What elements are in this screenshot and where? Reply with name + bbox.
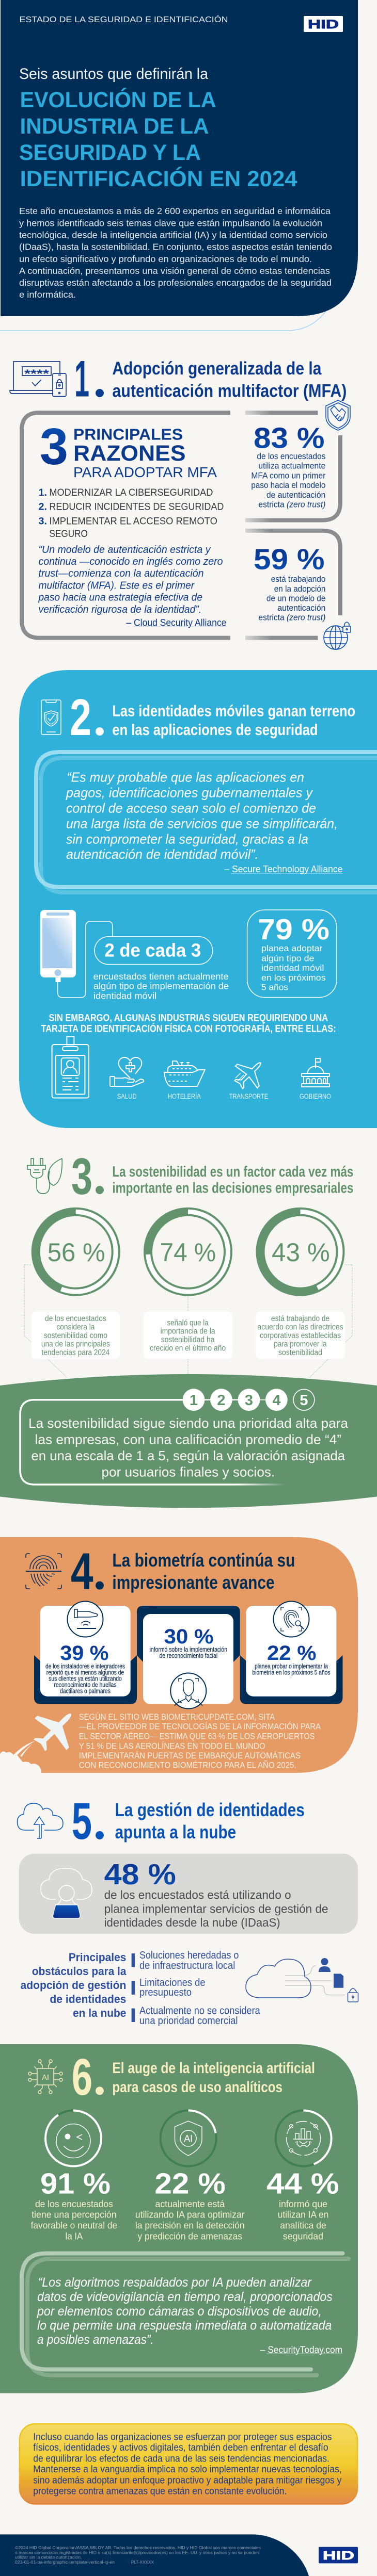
stat: 2 de cada 3: encuestados tienen actualmente <box>93 971 229 982</box>
intro paragraph: e informática. <box>19 289 76 300</box>
card: 43 percent text: está trabajando de <box>271 1314 329 1323</box>
logo: HID footer <box>319 2547 358 2563</box>
heading: identidades moviles: en las aplicaciones de seguridad <box>112 721 318 739</box>
card: 43 percent text: para promover la <box>274 1340 327 1348</box>
card: 22 percent: biometría en los próximos 5 años <box>252 1669 331 1676</box>
intro paragraph: (IDaaS), hasta la sostenibilidad. En conjunto, estos aspectos están teniendo <box>19 242 332 252</box>
stat: 79 percent <box>247 910 337 998</box>
panel: blue background <box>19 670 377 1128</box>
quote: security today <box>37 2275 343 2355</box>
panel: gray stat <box>19 1854 358 1934</box>
stat: 83 percent: estricta (zero trust) <box>258 500 325 510</box>
stat: 59 percent <box>254 543 325 623</box>
stat: 83 percent <box>251 422 326 510</box>
callout: conclusion: sino además adoptar un enfoque proactivo y adaptable para mitigar riesgos y <box>33 2474 342 2486</box>
icon: plug with leaf <box>27 1159 62 1194</box>
quote: cloud security alliance: trust—comienza con la autenticación <box>38 568 203 579</box>
chart: ring 43 percent <box>260 1212 340 1292</box>
card: 56 percent text: sostenibilidad como <box>44 1331 107 1340</box>
panel: quote frame back <box>41 758 377 892</box>
stat: 48 percent: 48 % <box>104 1858 176 1891</box>
heading: 3 principales razones: PRINCIPALES <box>73 426 183 444</box>
panel: stat 83 frame <box>245 413 340 520</box>
quote: security today: – SecurityToday.com <box>260 2344 342 2355</box>
quote: security today: lo que permite una respuesta inmediata o automatizada <box>37 2318 332 2333</box>
panel: quote frame back <box>27 2259 349 2375</box>
card: 74 percent text: importancia de la <box>161 1327 215 1336</box>
connectors: dotted lines <box>24 1265 352 1378</box>
decorative outline behind header <box>0 304 331 331</box>
main title: INDUSTRIA DE LA <box>20 114 209 139</box>
quote: security today: a posibles amenazas”. <box>37 2333 154 2347</box>
stat: 59 percent: estricta (zero trust) <box>258 613 325 623</box>
stat: 91 percent: tiene una percepción <box>32 2209 117 2220</box>
heading: obstacles: Principales <box>69 1951 126 1964</box>
heading: 3 principales razones <box>40 418 217 480</box>
panel: header <box>0 0 358 331</box>
panel: quote frame front <box>36 752 377 887</box>
stat: 91 percent: la IA <box>66 2231 83 2242</box>
quote: cloud security alliance: – Cloud Security Alliance <box>126 617 226 628</box>
heading number 6: 6 <box>72 2048 92 2106</box>
stat: 59 percent: en la adopción <box>274 584 325 594</box>
heading number 1: 1 <box>74 350 89 407</box>
panel: orange background <box>0 1537 358 1773</box>
card: 56 percent text <box>31 1311 120 1359</box>
quote: secure technology alliance: control de acceso sean solo el comienzo de <box>66 800 316 816</box>
text: sustainability rating <box>28 1415 349 1479</box>
list: reasons: REDUCIR INCIDENTES DE SEGURIDAD <box>49 501 224 513</box>
quote: security today: “Los algoritmos respaldados por IA pueden analizar <box>38 2275 312 2290</box>
section 4: biometrics <box>0 1537 358 1773</box>
list: reasons: MODERNIZAR LA CIBERSEGURIDAD <box>49 487 213 498</box>
section 1: MFA <box>10 350 351 649</box>
stat: 44 percent: 44 % <box>266 2167 339 2200</box>
section 6: artificial intelligence <box>0 2044 358 2393</box>
quote: secure technology alliance: “Es muy probable que las aplicaciones en <box>67 769 304 785</box>
stat: 83 percent: utiliza actualmente <box>258 461 325 470</box>
heading number 2: 2 <box>70 689 91 746</box>
stat: 91 percent: favorable o neutral de <box>31 2220 117 2231</box>
card: 43 percent text: corporativas establecidas <box>260 1331 341 1340</box>
quote: security today: por elementos como cámaras o dispositivos de audio, <box>37 2304 322 2319</box>
card: 39 percent: reportó que al menos algunos de <box>46 1669 124 1676</box>
text: airport statistic: EL SECTOR AÉREO— ESTIMA QUE 63 % DE LOS AEROPUERTOS <box>79 1731 315 1741</box>
card: 56 percent text: considera la <box>56 1323 95 1332</box>
callout: conclusion: de equilibrar los efectos de cada una de las seis tendencias mencionadas. <box>33 2453 329 2464</box>
stat: 79 percent: 79 % <box>258 913 329 946</box>
heading: biometria <box>112 1550 295 1593</box>
card: 39 percent: de los instaladores e integradores <box>45 1663 125 1670</box>
card: 74 percent text: crecido en el último año <box>150 1344 226 1352</box>
quote: cloud security alliance: continua —conocido en inglés como zero <box>38 556 223 567</box>
heading: biometria: La biometría continúa su <box>112 1550 295 1571</box>
text: airport statistic: Y 51 % DE LAS AEROLÍNEAS EN TODO EL MUNDO <box>79 1741 265 1751</box>
intro paragraph: A continuación, presentamos una visión general de cómo estas tendencias <box>19 266 330 276</box>
quote: secure technology alliance: – Secure Technology Alliance <box>224 864 342 874</box>
heading: gestion de identidades: La gestión de identidades <box>115 1799 305 1820</box>
heading: obstacles: obstáculos para la <box>32 1965 127 1978</box>
list: obstacles: una prioridad comercial <box>139 2015 238 2027</box>
heading: obstacles: adopción de gestión <box>21 1979 126 1992</box>
rating scale 1 to 5: 2 <box>217 1392 225 1409</box>
text: airport statistic: CON RECONOCIMIENTO BIOMÉTRICO PARA EL AÑO 2025. <box>79 1760 296 1770</box>
logo: HID footer: HID <box>323 2549 354 2562</box>
heading: 3 principales razones: PARA ADOPTAR MFA <box>73 464 217 480</box>
footer legal text: ©2024 HID Global Corporation/ASSA ABLOY AB. Todos los derechos reservados. HID y HID Global son marcas comerciales <box>15 2545 261 2550</box>
logo: HID <box>304 16 343 32</box>
stat: 22 percent: 22 % <box>154 2167 226 2200</box>
text: sustainability rating: en una escala de 1 a 5, según la valoración asignada <box>31 1448 345 1463</box>
stat: 83 percent: de los encuestados <box>257 452 325 461</box>
stat: 2 de cada 3: identidad móvil <box>93 990 156 1001</box>
icon: AI chip: AI <box>42 2073 49 2082</box>
stat: 48 percent: planea implementar servicios de gestión de <box>104 1902 328 1916</box>
card: 39 percent: dactilares o palmares <box>60 1687 111 1694</box>
intro paragraph: un efecto significativo y profundo en organizaciones de todo el mundo. <box>19 254 312 264</box>
chart: ring 56 percent: 56 % <box>48 1238 105 1267</box>
heading: obstacles <box>21 1951 127 2019</box>
stat: 91 percent: de los encuestados <box>35 2198 113 2209</box>
icon: hand and wifi <box>67 1601 103 1637</box>
quote: cloud security alliance: multifactor (MFA). Este es el primer <box>38 580 195 591</box>
card: 39 percent: sus clientes ya están utilizando <box>49 1675 122 1683</box>
card: 39 percent: reconocimiento de huellas <box>54 1682 117 1689</box>
heading: inteligencia artificial: para casos de uso analíticos <box>112 2079 282 2096</box>
card: 74 percent text <box>144 1311 232 1359</box>
rating scale 1 to 5: 5 <box>300 1392 308 1409</box>
card: 30 percent: 30 % <box>164 1625 214 1648</box>
card: 30 percent: de reconocimiento facial <box>159 1652 217 1659</box>
card: 30 percent <box>137 1606 240 1708</box>
list: reasons <box>38 487 224 540</box>
panel: green background <box>0 2044 358 2393</box>
chart: ring 74 percent <box>148 1212 228 1292</box>
stat: 44 percent: analítica de <box>280 2220 326 2231</box>
stat: 91 percent <box>31 2167 117 2242</box>
list: obstacles: Actualmente no se considera <box>139 2005 260 2016</box>
heading: inteligencia artificial <box>112 2060 315 2096</box>
stat: 2 de cada 3: 2 de cada 3 <box>104 940 201 960</box>
footer legal text: utilizar sin la debida autorización. <box>15 2555 82 2560</box>
intro paragraph: tecnológica, desde la inteligencia artificial (IA) y la identidad como servicio <box>19 230 327 240</box>
heading number 4: 4 <box>71 1543 93 1601</box>
stat: 22 percent: la precisión en la detección <box>135 2220 245 2231</box>
list: obstacles: de infraestructura local <box>139 1960 235 1971</box>
stat: 2 de cada 3: algún tipo de implementación de <box>93 981 229 991</box>
icon: airplane with cloud <box>0 1698 87 1773</box>
stat: 83 percent: paso hacia el modelo <box>251 481 325 490</box>
quote: security today: datos de videovigilancia en tiempo real, proporcionados <box>37 2290 333 2304</box>
icon: fingerprint search <box>274 1601 309 1637</box>
stat: 44 percent: informó que <box>279 2198 327 2209</box>
heading: adopcion generalizada <box>112 358 347 401</box>
label: hoteleria: HOTELERÍA <box>168 1092 201 1100</box>
card: 56 percent text: de los encuestados <box>45 1314 106 1323</box>
panel: quote frame front <box>22 2253 343 2370</box>
panel: band frame <box>20 1400 238 1485</box>
stat: 48 percent: de los encuestados está utilizando o <box>104 1888 291 1902</box>
main title: IDENTIFICACIÓN EN 2024 <box>20 166 297 191</box>
stat: 83 percent: 83 % <box>254 422 324 455</box>
quote: secure technology alliance <box>66 769 343 874</box>
chart: ring 91 percent with smile <box>45 2111 101 2166</box>
icon: phone with shield <box>41 700 61 735</box>
card: 56 percent text: una de las principales <box>41 1340 110 1348</box>
quote: cloud security alliance: verificación rigurosa de la identidad”. <box>38 604 201 615</box>
stat: 44 percent: utilizan IA en <box>278 2209 328 2220</box>
heading: obstacles: en la nube <box>73 2007 126 2019</box>
chart: ring 43 percent: 43 % <box>272 1238 330 1267</box>
stat: 22 percent <box>135 2167 245 2242</box>
main title: SEGURIDAD Y LA <box>19 140 201 165</box>
card: 22 percent: 22 % <box>267 1642 316 1665</box>
stat: 83 percent: MFA como un primer <box>251 471 326 481</box>
footer legal text: 023-01-01-ba-inforgraphic-template-vertical-ig-en <box>15 2559 115 2565</box>
stat: 79 percent: algún tipo de <box>261 953 314 963</box>
label: gobierno: GOBIERNO <box>300 1092 331 1100</box>
callout: conclusion: Mantenerse a la vanguardia implica no solo implementar nuevas tecnologías, <box>33 2464 342 2475</box>
icon: AI chip <box>28 2060 62 2094</box>
icon: globe with lock <box>324 622 351 649</box>
label: transporte: TRANSPORTE <box>229 1092 268 1100</box>
stat: 83 percent: de autenticación <box>266 491 325 500</box>
heading: gestion de identidades <box>115 1799 305 1843</box>
rating scale 1 to 5 <box>183 1389 315 1411</box>
chart: ring 22 percent with shield: AI <box>184 2133 193 2144</box>
text: physical id note <box>41 1013 336 1034</box>
panel: three reasons frame <box>22 413 230 638</box>
text: sustainability rating: las empresas, con una calificación promedio de “4” <box>35 1432 341 1447</box>
icon: plane <box>228 1052 272 1100</box>
icon: laptop and phone with password <box>10 362 66 396</box>
chart: ring 44 percent with analytics <box>276 2111 332 2166</box>
icon: laptop and phone with password: **** <box>24 367 50 380</box>
stat: 22 percent: actualmente está <box>155 2198 225 2209</box>
main title <box>19 87 297 191</box>
main title: EVOLUCIÓN DE LA <box>20 87 216 112</box>
logo: HID: HID <box>308 18 339 31</box>
list: reasons: 1. <box>38 487 47 498</box>
quote: secure technology alliance: pagos, identificaciones gubernamentales y <box>66 785 313 801</box>
list: obstacles: Limitaciones de <box>139 1977 206 1988</box>
panel: green band <box>0 1374 377 1508</box>
section 5: cloud identity <box>18 1792 358 2027</box>
subtitle: Seis asuntos que definirán la <box>19 66 208 83</box>
icon: shield with handshake <box>326 400 350 430</box>
section 2: mobile identities <box>19 670 377 1128</box>
heading: 3 principales razones: 3 <box>40 418 68 476</box>
text: sustainability rating: por usuarios finales y socios. <box>101 1464 275 1479</box>
intro paragraph <box>19 206 332 300</box>
card: 43 percent text <box>256 1311 345 1359</box>
list: reasons: 3. <box>38 515 47 527</box>
icon: government building <box>300 1058 331 1100</box>
card: 22 percent: planea probar o implementar la <box>255 1663 328 1670</box>
heading: gestion de identidades: apunta a la nube <box>115 1821 236 1843</box>
card: 74 percent text: sostenibilidad ha <box>161 1335 215 1344</box>
list: obstacles: presupuesto <box>139 1987 192 1998</box>
intro paragraph: y hemos identificado seis temas clave que están impulsando la evolución <box>19 218 322 229</box>
stat: 79 percent: planea adoptar <box>261 943 323 953</box>
stat: 79 percent: 5 años <box>261 982 288 992</box>
heading: biometria: impresionante avance <box>112 1572 275 1593</box>
card: 22 percent <box>240 1601 343 1704</box>
text: airport statistic <box>79 1712 321 1770</box>
text: physical id note: SIN EMBARGO, ALGUNAS INDUSTRIAS SIGUEN REQUIRIENDO UNA <box>49 1013 328 1023</box>
icon: fingerprint <box>26 1554 61 1589</box>
rating scale 1 to 5: 1 <box>190 1392 198 1409</box>
heading: identidades moviles <box>112 702 355 739</box>
quote: secure technology alliance: sin comprometer la seguridad, gracias a la <box>66 831 308 846</box>
panel: footer background <box>0 2534 309 2576</box>
stat: 44 percent: seguridad <box>283 2231 323 2242</box>
card: 39 percent <box>34 1601 137 1704</box>
eyebrow text: ESTADO DE LA SEGURIDAD E IDENTIFICACIÓN <box>20 14 228 24</box>
list: reasons: SEGURO <box>49 528 88 540</box>
heading: inteligencia artificial: El auge de la inteligencia artificial <box>112 2060 315 2077</box>
heading: sostenibilidad <box>112 1164 353 1196</box>
stat: 79 percent: identidad móvil <box>261 963 324 973</box>
chart: ring 56 percent <box>36 1212 116 1292</box>
icon: cloud upload <box>18 1803 63 1838</box>
stat: 48 percent <box>104 1858 328 1929</box>
icon: ship <box>164 1061 205 1100</box>
text: sustainability rating: La sostenibilidad sigue siendo una prioridad alta para <box>28 1415 349 1431</box>
stat: 79 percent: en los próximos <box>261 973 326 983</box>
footer legal text: PLT-XXXXX <box>131 2559 154 2565</box>
rating scale 1 to 5: 3 <box>245 1392 253 1409</box>
panel: stat 59 frame <box>245 531 340 638</box>
heading number 3: 3 <box>71 1148 92 1205</box>
icon: smartphone with cable <box>40 910 113 998</box>
card: 30 percent: informó sobre la implementación <box>150 1646 227 1653</box>
heading: obstacles: de identidades <box>50 1993 126 2006</box>
rating scale 1 to 5: 4 <box>272 1392 280 1409</box>
callout: conclusion: físicos, identidades y activos digitales, también deben enfrentar el desafío <box>33 2442 328 2453</box>
heading: 3 principales razones: RAZONES <box>73 441 186 466</box>
text: airport statistic: IMPLEMENTARÁN PUERTAS DE EMBARQUE AUTOMÁTICAS <box>79 1751 301 1760</box>
card: 56 percent text: tendencias para 2024 <box>41 1348 110 1357</box>
stat: 59 percent: de un modelo de <box>266 594 325 604</box>
quote: cloud security alliance: “Un modelo de autenticación estricta y <box>38 544 211 556</box>
footer <box>0 2534 358 2576</box>
icon: id badge <box>52 1037 89 1098</box>
footer legal text: o marcas comerciales registradas de HID o su(s) licenciante(s)/proveedor(es) en los EE. UU. y otros países y no se pueden <box>15 2550 259 2555</box>
heading number 5: 5 <box>72 1792 92 1850</box>
card: 43 percent text: acuerdo con las directrices <box>257 1323 343 1332</box>
quote: cloud security alliance <box>38 544 227 628</box>
icon: cloud with person, document and lock <box>246 1958 358 2002</box>
stat: 91 percent: 91 % <box>40 2167 111 2200</box>
stat: 2 de cada 3 <box>93 937 229 1001</box>
text: airport statistic: —EL PROVEEDOR DE TECNOLOGÍAS DE LA INFORMACIÓN PARA <box>79 1722 321 1732</box>
quote: secure technology alliance: una larga lista de servicios que se simplificarán, <box>66 816 338 832</box>
stat: 44 percent <box>266 2167 339 2242</box>
stat: 22 percent: utilizando IA para optimizar <box>135 2209 245 2220</box>
list: obstacles <box>132 1950 260 2027</box>
section 3: sustainability <box>0 1148 377 1508</box>
icon: face recognition <box>170 1673 206 1708</box>
icon: health <box>110 1057 144 1100</box>
quote: cloud security alliance: paso hacia una estrategia efectiva de <box>38 592 202 604</box>
label: salud: SALUD <box>117 1092 137 1100</box>
chart: ring 74 percent: 74 % <box>160 1238 216 1267</box>
callout: conclusion: Incluso cuando las organizaciones se esfuerzan por proteger sus espacios <box>33 2432 332 2443</box>
stat: 48 percent: identidades desde la nube (IDaaS) <box>104 1916 280 1929</box>
chart: ring 22 percent with shield <box>161 2111 216 2166</box>
icon: cloud person <box>41 1868 92 1918</box>
intro paragraph: Este año encuestamos a más de 2 600 expertos en seguridad e informática <box>19 206 331 216</box>
intro paragraph: disruptivas están afectando a los profesionales encargados de la seguridad <box>19 278 332 288</box>
stat: 59 percent: 59 % <box>254 543 324 576</box>
list: reasons: IMPLEMENTAR EL ACCESO REMOTO <box>49 515 217 527</box>
card: 39 percent: 39 % <box>60 1642 108 1665</box>
list: reasons: 2. <box>38 501 47 513</box>
card: 74 percent text: señaló que la <box>167 1318 209 1327</box>
text: airport statistic: SEGÚN EL SITIO WEB BIOMETRICUPDATE.COM, SITA <box>79 1712 275 1722</box>
card: 43 percent text: sostenibilidad <box>278 1348 322 1357</box>
list: obstacles: Soluciones heredadas o <box>139 1950 239 1961</box>
text: physical id note: TARJETA DE IDENTIFICACIÓN FÍSICA CON FOTOGRAFÍA, ENTRE ELLAS: <box>41 1023 336 1034</box>
stat: 22 percent: y predicción de amenazas <box>138 2231 242 2242</box>
stat: 59 percent: autenticación <box>277 604 325 613</box>
decorative frame fade <box>238 1483 286 1486</box>
footer legal text <box>15 2545 261 2565</box>
quote: secure technology alliance: autenticación de identidad móvil”. <box>66 846 258 862</box>
stat: 59 percent: está trabajando <box>271 575 325 584</box>
header background <box>1 0 358 316</box>
callout: conclusion: protegerse contra amenazas que están en constante evolución. <box>33 2485 287 2497</box>
heading: adopcion generalizada: Adopción generalizada de la <box>112 358 322 379</box>
callout: conclusion <box>20 2424 357 2504</box>
